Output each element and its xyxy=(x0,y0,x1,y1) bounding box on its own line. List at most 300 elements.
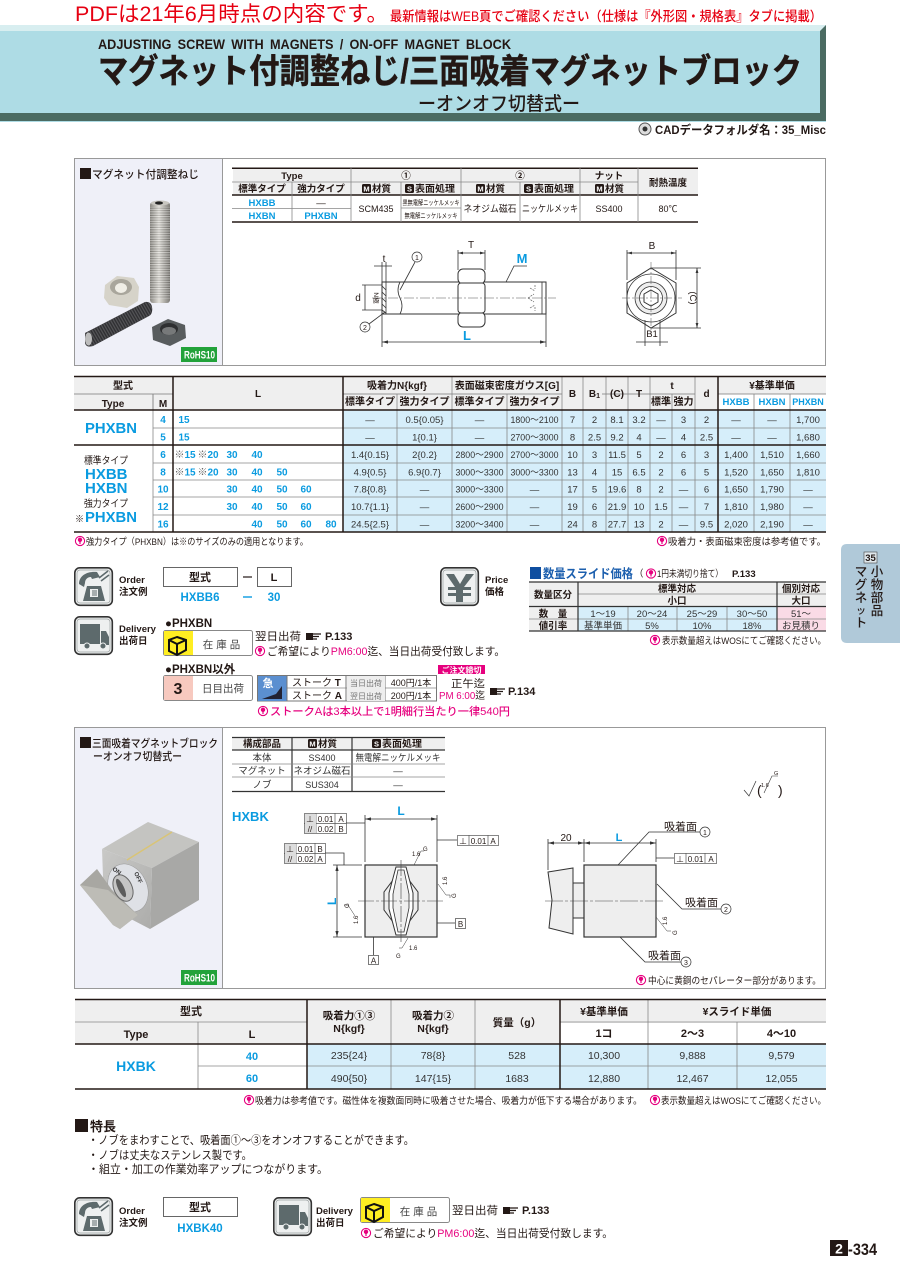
table: quantity slide price: 1～19 xyxy=(590,609,616,620)
size and length columns: ※20 xyxy=(197,468,219,478)
table: quantity slide price: 大口 xyxy=(791,595,811,607)
table: PHXBN / HXBB / HXBN specifications: HXBB xyxy=(723,397,750,408)
CAD folder label: CADデータフォルダ名：35_Misc xyxy=(655,122,826,137)
dimension: L xyxy=(382,314,546,347)
data rows: 3200～3400 xyxy=(456,520,504,530)
callout: adsorption face 3 xyxy=(620,937,691,967)
tolerance frame 2 xyxy=(284,843,344,865)
tolerance frame 3 xyxy=(437,835,498,846)
size and length columns: 12 xyxy=(157,502,169,513)
table: quantity slide price: 51～ xyxy=(791,609,812,620)
table header: 強力 xyxy=(674,395,694,408)
size and length columns: 16 xyxy=(157,520,169,530)
stock box: 翌日出荷 xyxy=(452,1204,498,1217)
table: quantity slide price: 個別対応 xyxy=(782,583,820,595)
datum A xyxy=(368,937,378,966)
express shipping table xyxy=(258,675,436,702)
HXBK table header: 吸着力①③ xyxy=(323,1009,376,1022)
table header: 型式 xyxy=(113,379,133,392)
dimension: d xyxy=(355,285,382,310)
data rows: 24.5{2.5} xyxy=(351,520,389,530)
data rows: 8 xyxy=(592,520,597,530)
data rows: 9.5 xyxy=(700,520,713,530)
table: components: 無電解ニッケルメッキ xyxy=(356,752,440,764)
HXBK table header: 2～3 xyxy=(681,1028,704,1040)
note: adsorption reference: 吸着力は参考値です。磁性体を複数面同時に吸着させた場合、吸着力が低下する場合があります。 xyxy=(255,1095,642,1107)
delivery label: Delivery xyxy=(316,1206,354,1217)
surface roughness marks: G xyxy=(423,847,428,853)
express shipping table: ストーク T xyxy=(292,677,341,689)
photo: screws and nuts xyxy=(85,200,186,347)
icon: telephone xyxy=(75,1198,112,1235)
photo: magnet block: OFF xyxy=(132,871,143,885)
side tab: small parts / magnet: 35 xyxy=(865,553,876,564)
data rows: ― xyxy=(420,502,430,513)
label: M xyxy=(506,251,527,282)
data rows: 6 xyxy=(681,468,686,478)
delivery: PHXBN xyxy=(164,618,505,658)
table header: 標準タイプ xyxy=(454,395,504,408)
badge: RoHS10 xyxy=(181,347,217,362)
data rows: ― xyxy=(656,432,666,444)
data rows: 13 xyxy=(567,468,578,478)
type names: 標準タイプ xyxy=(84,454,128,467)
table: materials: ナット xyxy=(595,171,623,182)
order deadline: PM 6:00迄 xyxy=(439,689,485,702)
data rows: 11.5 xyxy=(608,450,626,461)
drawing: screw end view xyxy=(622,241,701,346)
order label xyxy=(119,1206,148,1229)
delivery: HXBK xyxy=(274,1198,613,1240)
data rows: 9.2 xyxy=(610,432,624,444)
data rows: 2{0.2} xyxy=(412,450,437,461)
delivery: other than PHXBN: 3 xyxy=(174,681,183,698)
data rows: 2,020 xyxy=(724,520,748,530)
surface roughness legend xyxy=(744,771,783,798)
surface roughness legend: 1.6 xyxy=(761,783,769,789)
size and length columns: 60 xyxy=(300,502,312,513)
data rows: 4 xyxy=(636,432,642,444)
table header: 強力タイプ xyxy=(510,395,560,408)
table: materials: ― xyxy=(316,198,326,209)
express shipping table: 400円/1本 xyxy=(391,677,431,688)
HXBK table body: 60 xyxy=(246,1073,258,1085)
surface roughness mark: 1.6 xyxy=(663,916,669,925)
order code boxes: 型式 xyxy=(189,570,211,584)
data rows: 3000～3300 xyxy=(456,468,504,478)
HXBK table body: 12,055 xyxy=(765,1073,798,1085)
HXBK table header: 型式 xyxy=(180,1004,202,1018)
type names: PHXBN xyxy=(85,420,137,437)
delivery label: 出荷日 xyxy=(119,635,148,647)
size and length columns: 40 xyxy=(251,468,263,478)
callout: adsorption face 1 xyxy=(618,820,710,865)
data rows: ― xyxy=(679,520,689,530)
tolerance frame 1: // xyxy=(308,825,313,834)
data rows: 2.5 xyxy=(588,432,601,444)
table header: (C) xyxy=(610,389,624,400)
data rows: 2 xyxy=(592,415,597,426)
data rows: 19 xyxy=(567,502,578,513)
data rows: 1,980 xyxy=(760,502,784,513)
HXBK table body: 9,888 xyxy=(679,1050,706,1062)
HXBK table body: 78{8} xyxy=(421,1050,446,1062)
delivery: PHXBN: P.133 xyxy=(325,631,352,643)
badge: RoHS10 xyxy=(181,970,217,985)
data rows: 1,680 xyxy=(796,432,820,444)
data rows: 1,520 xyxy=(724,468,748,478)
table header: L xyxy=(255,389,261,400)
delivery label xyxy=(119,624,157,647)
HXBK table header: Type xyxy=(124,1029,148,1041)
table: quantity slide price: 20～24 xyxy=(637,609,667,620)
table header: 強力タイプ xyxy=(400,395,450,408)
table: materials: Type xyxy=(281,171,303,182)
surface roughness legend: G xyxy=(774,771,778,777)
data rows: 2 xyxy=(658,450,664,461)
stock box: P.133 xyxy=(522,1205,549,1217)
data rows: 1,700 xyxy=(796,415,820,426)
data rows: 2.5 xyxy=(700,432,713,444)
tolerance frame 2: // xyxy=(288,855,293,864)
size and length columns: 40 xyxy=(251,520,263,530)
icon: yen xyxy=(441,568,478,605)
header: surface treatment 1: 表面処理 xyxy=(415,183,456,195)
size and length columns: 50 xyxy=(276,502,288,513)
data rows: 5 xyxy=(592,484,597,496)
drawing: screw side view xyxy=(355,240,556,347)
side tab: small parts / magnet: ッ xyxy=(856,606,866,617)
data rows: 1,810 xyxy=(724,502,748,513)
order code boxes: 30 xyxy=(268,592,280,604)
data rows: 1,790 xyxy=(760,484,784,496)
HXBK table body: 1683 xyxy=(505,1073,529,1085)
table: quantity slide price: お見積り xyxy=(782,620,820,632)
surface roughness marks: 1.6 xyxy=(443,876,449,885)
features list xyxy=(88,1133,414,1176)
HXBK table body: 12,467 xyxy=(676,1073,709,1085)
type names: PHXBN xyxy=(85,509,137,526)
size and length columns: 15 xyxy=(178,432,190,444)
table: quantity slide price: 1円未満切り捨て） xyxy=(657,568,723,580)
header: nut material: M xyxy=(596,184,603,194)
tolerance frame 4 xyxy=(656,853,716,864)
badge: RoHS10: RoHS10 xyxy=(184,350,215,362)
size and length columns: 80 xyxy=(325,520,337,530)
data rows: 2,190 xyxy=(760,520,784,530)
surface roughness marks: G xyxy=(345,903,351,908)
order label: 注文例 xyxy=(119,1217,148,1229)
data rows: 2 xyxy=(658,520,664,530)
dimension: T xyxy=(458,240,485,270)
data rows: 6.9{0.7} xyxy=(408,468,441,478)
note: adsorption reference: 表示数量超えはWOSにてご確認ください。 xyxy=(661,1095,826,1107)
data rows: 2 xyxy=(658,468,664,478)
header: surface treatment 1: S xyxy=(407,184,412,194)
table: quantity slide price: 10% xyxy=(692,621,712,632)
data rows: ― xyxy=(530,520,540,530)
photo: magnet block: ON xyxy=(111,867,122,877)
table: components: ― xyxy=(393,780,403,791)
data rows: 27.7 xyxy=(608,520,626,530)
data rows: 3000～3300 xyxy=(456,484,504,496)
data rows: ― xyxy=(679,484,689,496)
data rows: 21.9 xyxy=(608,502,626,513)
size and length columns: 30 xyxy=(226,502,238,513)
data rows xyxy=(351,415,820,530)
data rows: 1.4{0.15} xyxy=(351,450,389,461)
order deadline: ご注文締切 xyxy=(442,665,482,675)
data rows: ― xyxy=(679,502,689,513)
dimension: L: L xyxy=(616,832,623,844)
order example: HXBK xyxy=(75,1198,238,1235)
HXBK table body: 490{50} xyxy=(331,1073,368,1085)
data rows: 2700～3000 xyxy=(510,432,558,444)
HXBK table header: 質量（g） xyxy=(493,1016,541,1029)
table header: ¥基準単価 xyxy=(749,379,795,392)
surface roughness marks: 1.6 xyxy=(354,915,360,924)
type names: HXBB xyxy=(85,466,128,483)
express shipping table: 翌日出荷 xyxy=(350,691,382,701)
datum B: B xyxy=(458,920,463,929)
dimension: T: T xyxy=(468,240,474,251)
data rows: 6 xyxy=(681,450,686,461)
surface roughness marks: 1.6 xyxy=(412,852,421,858)
page number xyxy=(830,1240,877,1259)
data rows: 6.5 xyxy=(632,468,646,478)
price label: Price xyxy=(485,575,508,586)
HXBK table header xyxy=(124,1004,796,1041)
data rows: 8.1 xyxy=(610,415,624,426)
HXBK table header: N{kgf} xyxy=(417,1023,449,1035)
delivery label: 出荷日 xyxy=(316,1217,345,1229)
side tab: small parts / magnet: 品 xyxy=(871,604,883,618)
table: components: 本体 xyxy=(252,752,272,764)
table: quantity slide price: 25～29 xyxy=(687,609,717,620)
order code boxes: HXBB6 xyxy=(181,592,219,604)
stock box xyxy=(360,1198,549,1222)
order code boxes xyxy=(164,568,292,604)
table header: t xyxy=(670,381,674,392)
data rows: 6 xyxy=(592,502,597,513)
tolerance frame 1: ⊥ xyxy=(306,815,314,824)
tolerance frame 2: B xyxy=(317,845,323,854)
express shipping table: 200円/1本 xyxy=(391,690,431,701)
size and length columns: ※15 xyxy=(174,450,196,461)
table: materials: HXBN xyxy=(249,211,276,222)
side tab: small parts / magnet: ト xyxy=(855,616,867,630)
panel: magnet block xyxy=(74,727,826,989)
delivery: other than PHXBN xyxy=(164,662,252,700)
label: HXBK: HXBK xyxy=(232,809,269,824)
table: quantity slide price: 30～50 xyxy=(737,609,767,620)
data rows: ― xyxy=(475,432,485,444)
header: surface treatment: S xyxy=(374,740,379,748)
HXBK table header: N{kgf} xyxy=(333,1023,365,1035)
header: surface treatment 2: S xyxy=(526,184,531,194)
table: materials: 黒無電解ニッケルメッキ xyxy=(402,198,460,207)
header: material xyxy=(308,738,338,750)
data rows: 3 xyxy=(704,450,709,461)
table header: 1 xyxy=(596,393,600,400)
data rows: 8 xyxy=(636,484,642,496)
table: materials: 無電解ニッケルメッキ xyxy=(404,211,458,220)
data rows: ― xyxy=(530,484,540,496)
header: surface treatment: 表面処理 xyxy=(382,738,423,750)
header: material: 材質 xyxy=(318,738,338,750)
data rows: 3 xyxy=(681,415,686,426)
data rows: 10 xyxy=(567,450,578,461)
table: materials: ② xyxy=(515,171,525,182)
data rows: 1.5 xyxy=(654,502,668,513)
note: same-day shipping: ご希望によりPM6:00迄、当日出荷受付致します。 xyxy=(373,1226,613,1240)
data rows: 24 xyxy=(567,520,578,530)
order code boxes: L xyxy=(271,572,278,584)
delivery: PHXBN: 翌日出荷 xyxy=(255,630,301,643)
HXBK table body: HXBK xyxy=(116,1058,156,1074)
side tab: small parts / magnet: 部 xyxy=(871,590,884,605)
table header: B xyxy=(569,389,576,400)
table: components: ノブ xyxy=(252,779,272,791)
label: M: M xyxy=(517,251,527,266)
data rows: ― xyxy=(803,502,813,513)
header: surface treatment xyxy=(372,738,423,750)
table header: B xyxy=(589,389,596,400)
header: material 1: M xyxy=(363,184,370,194)
data rows: 1,660 xyxy=(796,450,820,461)
callout: adsorption face 2: 2 xyxy=(724,907,728,914)
size and length columns: 30 xyxy=(226,450,238,461)
order label: Order xyxy=(119,1206,145,1217)
callout: adsorption face 1: 吸着面 xyxy=(664,820,697,833)
table: quantity slide price: 小口 xyxy=(667,595,687,607)
tolerance frame 2: ⊥ xyxy=(286,845,294,854)
photo: magnet block xyxy=(80,822,199,929)
tolerance frame 1 xyxy=(304,813,365,834)
table header: T xyxy=(636,389,642,400)
table: quantity slide price: 18% xyxy=(742,621,762,632)
note: adsorption reference xyxy=(244,1095,826,1107)
size and length columns: 8 xyxy=(160,468,166,478)
table: quantity slide price: 標準対応 xyxy=(658,583,696,595)
table: components: ネオジム磁石 xyxy=(293,765,351,777)
order label: 注文例 xyxy=(119,586,148,598)
data rows: 6 xyxy=(704,484,709,496)
HXBK table header: L xyxy=(249,1029,256,1041)
surface roughness mark: G xyxy=(673,930,679,935)
table: quantity slide price: （ xyxy=(634,568,644,580)
data rows: ― xyxy=(420,520,430,530)
HXBK table body: 528 xyxy=(508,1050,526,1062)
data rows: 4 xyxy=(681,432,686,444)
table header: 表面磁束密度ガウス[G] xyxy=(455,379,559,392)
data rows: 5 xyxy=(636,450,642,461)
data rows: 4.9{0.5} xyxy=(354,468,386,478)
features heading xyxy=(75,1119,116,1134)
data rows: 2800～2900 xyxy=(456,450,504,461)
HXBK table body: 9,579 xyxy=(768,1050,795,1062)
dimension: d: N極 xyxy=(372,292,381,304)
delivery: PHXBN: 在庫品 xyxy=(203,638,243,651)
data rows: ― xyxy=(530,502,540,513)
data rows: 2700～3000 xyxy=(510,450,558,461)
data rows: 5 xyxy=(704,468,709,478)
size and length columns: 4 xyxy=(160,415,166,426)
header: material: M xyxy=(309,740,316,748)
callout: part 2 xyxy=(360,312,385,332)
type names xyxy=(75,420,137,526)
delivery: PHXBN: ●PHXBN xyxy=(165,618,212,630)
dimension: B1: B1 xyxy=(646,329,658,340)
tolerance frame 4: ⊥ xyxy=(676,855,684,864)
table: materials: ① xyxy=(401,171,411,182)
dimension: t xyxy=(374,254,392,282)
HXBK table body: 12,880 xyxy=(588,1073,620,1085)
data rows: 1,400 xyxy=(724,450,748,461)
note: brass separator: 中心に黄銅のセパレーター部分があります。 xyxy=(648,975,821,987)
table header: Type xyxy=(102,399,125,410)
order label: Order xyxy=(119,575,145,586)
table: quantity slide price: 基準単価 xyxy=(584,620,622,632)
data rows: ― xyxy=(656,415,666,426)
heading: magnet block xyxy=(80,736,218,763)
dimension: 20: 20 xyxy=(560,833,572,844)
size and length columns: 50 xyxy=(276,468,288,478)
table: materials: ネオジム磁石 xyxy=(464,203,516,215)
data rows: 1{0.1} xyxy=(412,432,437,444)
table header: 標準タイプ xyxy=(345,395,395,408)
table: materials: SCM435 xyxy=(358,204,394,214)
english title: ADJUSTING SCREW WITH MAGNETS / ON-OFF MAGNET BLOCK xyxy=(98,36,511,52)
table: quantity slide price: P.133 xyxy=(732,569,756,580)
dimension: L top: L xyxy=(397,804,405,818)
price label: 価格 xyxy=(485,586,505,598)
data rows: 7.8{0.8} xyxy=(354,484,386,496)
note: quantity display: 表示数量超えはWOSにてご確認ください。 xyxy=(662,635,826,647)
size and length columns xyxy=(157,415,337,530)
size and length columns: 10 xyxy=(157,484,169,496)
dimension: L xyxy=(584,832,656,862)
data rows: ― xyxy=(803,520,813,530)
panel: adjusting screw xyxy=(74,158,826,366)
header: surface treatment 2: 表面処理 xyxy=(534,183,575,195)
order deadline: P.134 xyxy=(508,686,536,698)
japanese title: マグネット付調整ねじ/三面吸着マグネットブロック xyxy=(98,52,802,91)
data rows: 4 xyxy=(592,468,597,478)
size and length columns: 6 xyxy=(160,450,166,461)
table: materials: SS400 xyxy=(595,204,623,214)
HXBK table body: 10,300 xyxy=(588,1050,620,1062)
header: nut material xyxy=(595,183,624,195)
header: material 2 xyxy=(476,183,506,195)
tolerance frame 1: B xyxy=(338,825,344,834)
data rows: ― xyxy=(731,415,741,426)
order code box: 型式 xyxy=(189,1200,211,1214)
order deadline xyxy=(438,665,536,702)
side tab: small parts / magnet: グ xyxy=(855,577,868,592)
tolerance frame 2: 0.01 xyxy=(298,845,314,854)
size and length columns: 50 xyxy=(276,484,288,496)
table: PHXBN / HXBB / HXBN specifications: PHXBN xyxy=(792,397,824,407)
title banner xyxy=(0,25,826,122)
datum B xyxy=(437,918,466,929)
table: components: ― xyxy=(393,766,403,777)
callout: adsorption face 2 xyxy=(657,884,731,914)
size and length columns: 15 xyxy=(178,415,190,426)
express shipping table: ストーク A xyxy=(292,690,342,702)
stock box: 在庫品 xyxy=(400,1205,440,1218)
size and length columns: 40 xyxy=(251,450,263,461)
